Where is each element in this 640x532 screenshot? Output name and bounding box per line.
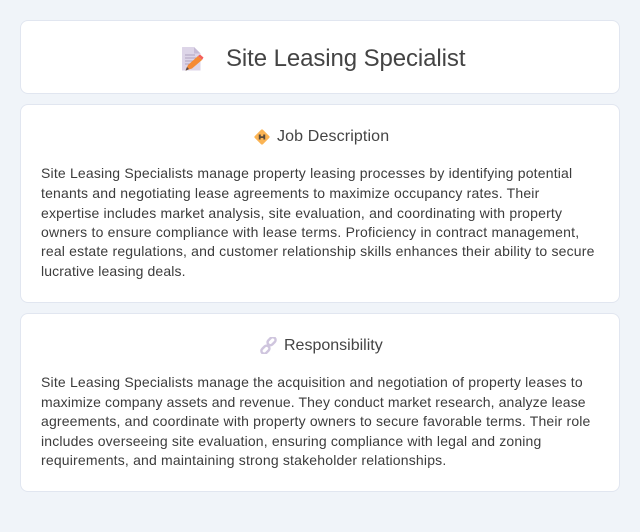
text: responsibility body: includes overseeing site evaluation, ensuring compliance with legal and zoning: [41, 433, 541, 449]
text: job description body: real estate regulations, and customer relationship skills enhances their ability to secure: [41, 243, 595, 259]
panel: responsibility: [20, 313, 620, 492]
title: Site Leasing Specialist: [226, 45, 465, 72]
text: responsibility body: Site Leasing Specialists manage the acquisition and negotiation of property leases to: [41, 374, 583, 390]
icon: link: [260, 337, 277, 354]
text: responsibility body: [41, 374, 590, 468]
heading: job description: Job Description: [277, 128, 389, 145]
text: responsibility body: maximize company assets and revenue. They conduct market research, analyze lease: [41, 394, 586, 410]
heading: responsibility: Responsibility: [284, 337, 383, 354]
text: job description body: [41, 165, 595, 279]
panel: job description: lucrative leasing deals.: [41, 263, 186, 279]
icon: diamond sign: [254, 129, 270, 145]
icon: document with pencil: [182, 47, 204, 70]
text: job description body: Site Leasing Specialists manage property leasing processes by identifying potential: [41, 165, 572, 181]
text: responsibility body: agreements, and coordinate with property owners to secure favorable terms. Their role: [41, 413, 590, 429]
panel: title card: [20, 20, 620, 94]
text: job description body: expertise includes market analysis, site evaluation, and coordinating with property: [41, 205, 562, 221]
panel: job description: [20, 104, 620, 303]
text: job description body: owners to ensure compliance with lease terms. Proficiency in contract management,: [41, 224, 579, 240]
text: job description body: tenants and negotiating lease agreements to maximize occupancy rates. Their: [41, 185, 539, 201]
text: responsibility body: requirements, and maintaining strong stakeholder relationships.: [41, 452, 446, 468]
